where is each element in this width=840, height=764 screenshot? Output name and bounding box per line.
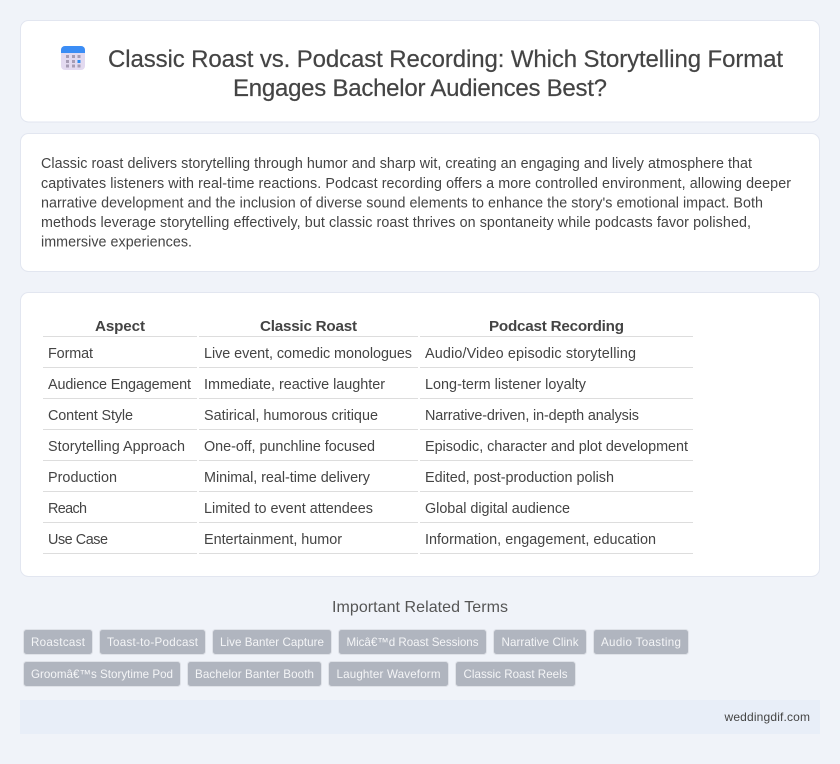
row: format	[48, 346, 636, 362]
table rules	[43, 336, 693, 554]
row: use case: Use Case	[48, 532, 108, 548]
panel: summary	[20, 134, 820, 272]
text block: summary	[41, 156, 791, 250]
text block: summary: immersive experiences.	[41, 234, 192, 250]
footer	[20, 700, 820, 734]
icon: calendar	[61, 46, 85, 70]
row: storytelling approach: One-off, punchline focused	[204, 439, 375, 455]
table header row	[95, 318, 624, 335]
row: production: Edited, post-production polish	[425, 470, 614, 486]
title	[108, 46, 783, 102]
row: audience engagement: Immediate, reactive laughter	[204, 377, 385, 393]
row: use case: Information, engagement, education	[425, 532, 656, 548]
row: content style: Narrative-driven, in-depth analysis	[425, 408, 639, 424]
row: audience engagement	[48, 377, 587, 393]
text block: summary: methods leverage storytelling effectively, but classic roast thrives on spontaneity while podcasts favor polished,	[41, 215, 751, 231]
row: reach	[48, 501, 570, 517]
row: content style	[48, 408, 639, 424]
tag	[456, 662, 576, 686]
tag: Micâ€™d Roast Sessions	[346, 636, 479, 649]
row: storytelling approach	[48, 439, 688, 455]
row: audience engagement: Audience Engagement	[48, 377, 191, 393]
title: Classic Roast vs. Podcast Recording: Which Storytelling Format	[108, 46, 783, 73]
tag	[24, 630, 92, 654]
tag	[24, 662, 180, 686]
tag	[594, 630, 688, 654]
tag	[100, 630, 206, 654]
tag	[338, 630, 486, 654]
row: content style: Content Style	[48, 408, 133, 424]
row: reach: Global digital audience	[425, 501, 570, 517]
text block: summary: Classic roast delivers storytelling through humor and sharp wit, creating an engaging and lively atmosphere that	[41, 156, 752, 172]
tag: Groomâ€™s Storytime Pod	[31, 668, 173, 681]
text block: summary: captivates listeners with real-time reactions. Podcast recording offers a more controlled environment, allowing deeper	[41, 176, 791, 192]
tag: Classic Roast Reels	[464, 668, 568, 681]
tag group: related terms	[24, 630, 688, 686]
row: content style: Satirical, humorous critique	[204, 408, 378, 424]
row: use case	[48, 532, 656, 548]
heading: related terms: Important Related Terms	[332, 599, 508, 616]
panel: comparison table	[20, 292, 820, 576]
text block: summary: narrative development and the inclusion of diverse sound elements to enhance the story's emotional impact. Both	[41, 196, 763, 212]
row: storytelling approach: Episodic, character and plot development	[425, 439, 688, 455]
row: production: Minimal, real-time delivery	[204, 470, 371, 486]
tag: Live Banter Capture	[220, 636, 324, 649]
tag: Bachelor Banter Booth	[195, 668, 314, 681]
row: format: Live event, comedic monologues	[204, 346, 412, 362]
row: storytelling approach: Storytelling Approach	[48, 439, 185, 455]
row: audience engagement: Long-term listener loyalty	[425, 377, 587, 393]
tag	[212, 630, 332, 654]
tag: Audio Toasting	[601, 636, 681, 649]
row: production	[48, 470, 614, 486]
title: Engages Bachelor Audiences Best?	[233, 75, 607, 102]
row: reach: Limited to event attendees	[204, 501, 373, 517]
tag: Toast-to-Podcast	[107, 636, 199, 649]
tag	[188, 662, 322, 686]
row: reach: Reach	[48, 501, 87, 517]
row: format: Format	[48, 346, 93, 362]
tag	[328, 662, 448, 686]
row: production: Production	[48, 470, 117, 486]
row: format: Audio/Video episodic storytelling	[425, 346, 636, 362]
tag: Narrative Clink	[502, 636, 579, 649]
table header row: Classic Roast	[260, 318, 357, 335]
table header row: Aspect	[95, 318, 145, 335]
panel: header	[20, 20, 820, 122]
tag	[494, 630, 586, 654]
tag: Laughter Waveform	[336, 668, 440, 681]
tag: Roastcast	[31, 636, 86, 649]
footer: weddingdif.com	[724, 710, 810, 724]
row: use case: Entertainment, humor	[204, 532, 342, 548]
table header row: Podcast Recording	[489, 318, 624, 335]
